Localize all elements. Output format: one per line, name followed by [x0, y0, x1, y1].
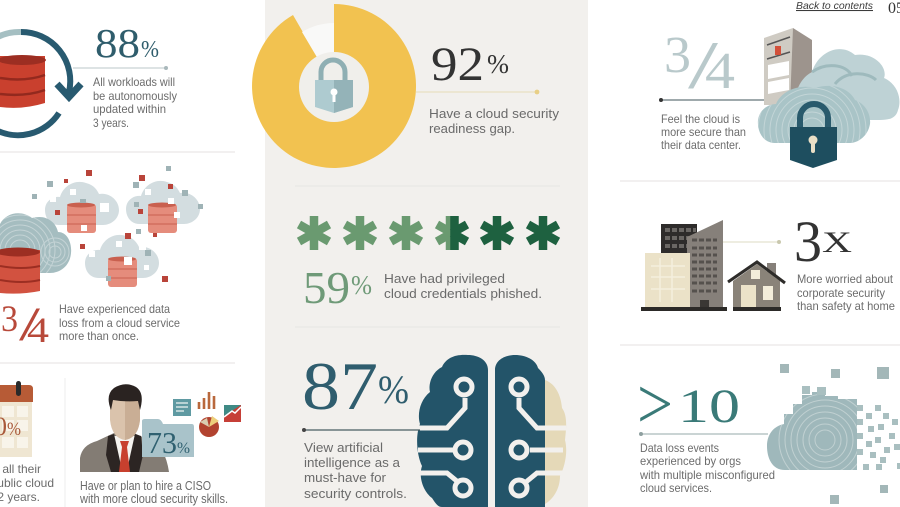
- icon: document: [173, 399, 191, 416]
- text: CISO: Have or plan to hire a CISO: [80, 478, 211, 493]
- icon: house: [728, 262, 785, 311]
- text: data loss: loss from a cloud service: [59, 316, 180, 330]
- stat: >10: [637, 364, 740, 444]
- icon: folder with 73%: %: [177, 440, 190, 457]
- panel: public cloud calendar: [0, 381, 54, 504]
- icon: folder with 73%: [142, 419, 194, 460]
- icon: fingerprint cloud: [758, 86, 870, 143]
- text: AI: intelligence as a: [304, 455, 401, 470]
- panel: CISO hiring: [79, 384, 241, 506]
- stat: 87%: %: [378, 367, 409, 412]
- stat: 3/4 red: 4: [27, 310, 49, 350]
- stat: 3/4 grey: 3: [664, 27, 691, 84]
- stat: 88%: [95, 20, 159, 66]
- stat: 3/4 red: 3: [1, 299, 18, 340]
- leader line: [302, 428, 420, 432]
- text: phished: [384, 271, 542, 301]
- text: more secure: [661, 112, 746, 152]
- text: data loss: more than once.: [59, 329, 139, 343]
- stat: 3/4 red: /: [19, 298, 41, 351]
- icon: city buildings: [641, 220, 727, 311]
- text: data loss events: cloud services.: [640, 481, 712, 495]
- stat: >10: 10: [678, 380, 740, 433]
- text: data loss: [59, 302, 180, 343]
- stat: 59%: [303, 263, 372, 313]
- text: workloads: [93, 75, 177, 130]
- text: data loss events: with multiple misconfigured: [639, 468, 775, 482]
- text: workloads: updated within: [93, 102, 166, 116]
- text: workloads: be autonomously: [93, 89, 177, 103]
- leader line: [416, 90, 539, 94]
- panel: corporate security 3X: [641, 209, 895, 313]
- stat: 59%: 59: [303, 263, 350, 313]
- icon: calendar: [0, 381, 33, 457]
- text: more secure: Feel the cloud is: [661, 112, 740, 126]
- leader line: [723, 240, 781, 244]
- icon: folder with 73%: 73: [147, 425, 177, 460]
- text: AI: must-have for: [304, 470, 387, 485]
- text: phished: cloud credentials phished.: [384, 286, 542, 301]
- icon: pixelated fingerprint cloud: [767, 386, 900, 470]
- stat: 3/4 grey: /: [688, 27, 718, 103]
- text: AI: [304, 440, 407, 501]
- text: worried: than safety at home: [797, 299, 895, 313]
- text: phished: Have had privileged: [384, 271, 505, 286]
- text: public cloud: [0, 462, 54, 504]
- icon: businessman: [80, 384, 169, 472]
- panel: phished 59%: [299, 216, 558, 313]
- text: data loss events: [639, 441, 775, 495]
- text: workloads: 3 years.: [93, 116, 129, 130]
- stat: 3/4 grey: 4: [705, 43, 735, 100]
- panel: readiness gap 92%: [252, 4, 560, 168]
- icon: padlock: [315, 60, 353, 113]
- stat: 92%: 92: [431, 38, 484, 91]
- stat: 88%: 88: [95, 20, 140, 66]
- text: worried: More worried about: [797, 272, 894, 286]
- icon: dark padlock: [790, 104, 837, 168]
- text: AI: View artificial: [304, 440, 383, 455]
- icon: back clouds: [795, 49, 899, 120]
- text: more secure: their data center.: [661, 138, 741, 152]
- icon: three small clouds with databases: [32, 166, 203, 287]
- stat: 3X: X: [822, 226, 852, 259]
- leader line: [73, 66, 168, 70]
- text: more secure: more secure than: [661, 125, 746, 139]
- text: readiness: [429, 106, 560, 136]
- stat: 88%: %: [141, 37, 159, 63]
- icon: scattered pixels: [780, 364, 889, 504]
- panel: autonomous updates 88%: [0, 20, 177, 135]
- text: data loss: Have experienced data: [59, 302, 170, 316]
- stat: 3X: 3: [794, 209, 822, 274]
- stat: 87%: [302, 348, 409, 424]
- stat: 3/4 red: [1, 298, 49, 351]
- icon: six asterisks: [299, 216, 558, 250]
- stat: calendar percentage: %: [7, 419, 21, 440]
- icon: large fingerprint cloud with database: [0, 213, 71, 294]
- chart: donut 92%: [252, 4, 416, 168]
- panel: central beige column: [265, 0, 588, 507]
- text: data loss events: experienced by orgs: [640, 454, 741, 468]
- stat: calendar percentage: [0, 412, 21, 441]
- text: AI: security controls.: [304, 486, 407, 501]
- text: worried: corporate security: [797, 286, 885, 300]
- text: CISO: with more cloud security skills.: [79, 491, 228, 506]
- stat: 59%: %: [351, 270, 372, 300]
- panel: data loss 3/4: [0, 166, 203, 351]
- icon: circular arrow around database: [0, 32, 81, 135]
- stat: 87%: 87: [302, 348, 378, 424]
- text: workloads: All workloads will: [93, 75, 175, 89]
- stat: 3X: [794, 209, 852, 274]
- leader line: [639, 432, 768, 436]
- navigation: back to contents: Back to contents: [796, 0, 874, 12]
- icon: server rack: [764, 28, 812, 105]
- text: readiness: Have a cloud security: [429, 106, 560, 121]
- icon: pie chart: [199, 416, 219, 437]
- panel: misconfigured >10: [637, 364, 900, 504]
- icon: line chart: [224, 405, 241, 422]
- text: data loss events: Data loss events: [640, 441, 719, 455]
- text: CISO: [79, 478, 228, 506]
- leader line: [659, 98, 768, 102]
- panel: AI 87%: [302, 348, 566, 507]
- text: readiness: readiness gap.: [429, 121, 515, 136]
- stat: 92%: [431, 38, 509, 91]
- panel: cloud vs data center 3/4: [659, 28, 900, 168]
- stat: 92%: %: [487, 49, 509, 79]
- stat: >10: >: [637, 364, 673, 444]
- text: worried: [797, 272, 895, 313]
- stat: 3/4 grey: [664, 27, 735, 103]
- icon: circuit brain: [417, 355, 566, 507]
- icon: bar chart: [199, 392, 214, 409]
